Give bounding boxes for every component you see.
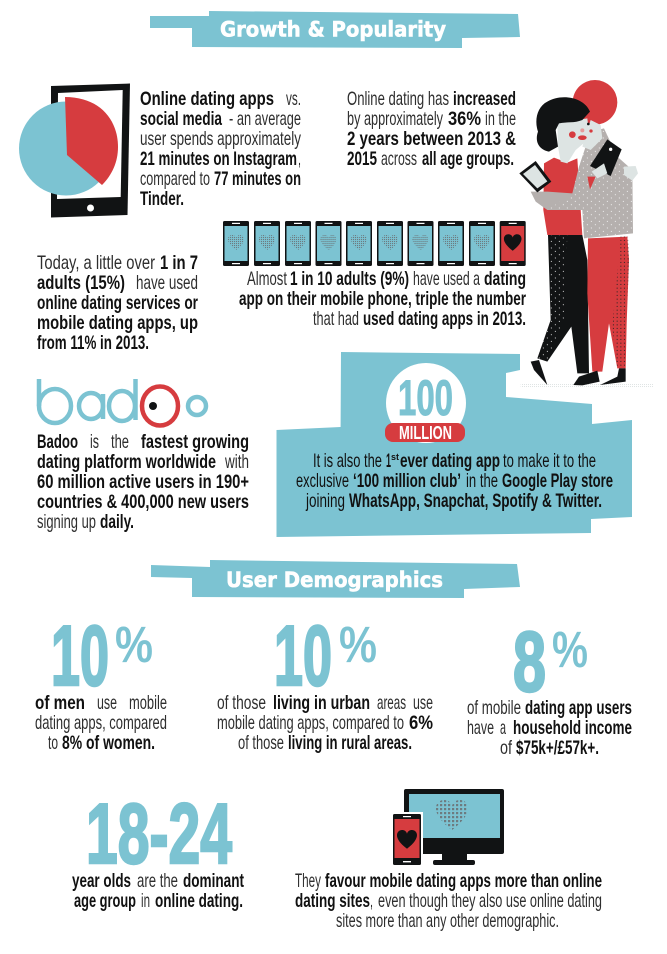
text: online dating increased 36%: 2015 xyxy=(347,148,377,170)
text: online dating increased 36%: Online dating has xyxy=(347,88,449,110)
stat: 18-24 age group xyxy=(72,787,244,912)
stat: 10% urban: use xyxy=(413,692,433,714)
text: 100 million club description: 1 xyxy=(386,450,391,472)
text: Badoo fastest growing: with xyxy=(224,451,249,473)
stat: 10% urban: 6% xyxy=(409,712,433,734)
text: Badoo fastest growing: Badoo xyxy=(37,431,78,453)
stat: 10% urban xyxy=(217,609,433,754)
text: 100 million club description: ‘100 million club’ xyxy=(353,470,461,492)
stat: 8% household income: of mobile xyxy=(467,697,521,719)
text: 100 million club description: It is also the xyxy=(313,450,382,472)
text: Badoo fastest growing: the xyxy=(111,431,129,453)
text: favour mobile dating apps: They xyxy=(295,870,321,892)
stat: 10% of men: 8% of women. xyxy=(62,732,155,754)
text: 1 in 10 adults: used dating apps in 2013. xyxy=(363,308,526,330)
text: Badoo fastest growing: fastest growing xyxy=(141,431,249,453)
heading: Growth & Popularity xyxy=(150,11,520,48)
text: 1 in 10 adults xyxy=(239,268,526,330)
text: 1 in 7 adults: from 11% in 2013. xyxy=(37,332,149,354)
text: Badoo fastest growing: countries & 400,000 new users xyxy=(37,491,249,513)
logo: badoo xyxy=(39,379,206,426)
text: Badoo fastest growing xyxy=(37,431,249,533)
stat: 10% urban: living in urban xyxy=(273,692,370,714)
text: online dating increased 36%: across xyxy=(381,148,417,170)
text: Badoo fastest growing: 60 million active users in 190+ xyxy=(37,471,249,493)
text: 1 in 10 adults: that had xyxy=(313,308,359,330)
illustration: couple with devices xyxy=(519,80,654,388)
text: apps vs social media: 77 minutes on xyxy=(214,168,301,190)
badge: 100 million: MILLION xyxy=(399,423,452,443)
text: Badoo fastest growing: signing up xyxy=(37,511,96,533)
stat: 8% household income: of xyxy=(500,737,512,759)
text: online dating increased 36%: 36% xyxy=(448,108,481,130)
text: 1 in 7 adults: adults (15%) xyxy=(37,272,125,294)
text: apps vs social media: social media xyxy=(140,108,222,130)
text: favour mobile dating apps: dating sites xyxy=(295,890,370,912)
badge: 100 million: 100 xyxy=(398,370,453,426)
text: apps vs social media xyxy=(140,88,301,210)
stat: 10% urban: mobile dating apps, compared to xyxy=(217,712,404,734)
text: 1 in 7 adults: Today, a little over xyxy=(37,252,155,274)
text: 100 million club description: exclusive xyxy=(296,470,349,492)
text: Badoo fastest growing: dating platform worldwide xyxy=(37,451,216,473)
text: 1 in 7 adults: mobile dating apps, up xyxy=(37,312,198,334)
text: apps vs social media: - an average xyxy=(229,108,301,130)
text: apps vs social media: compared to xyxy=(140,168,210,190)
icon: monitor and phone with hearts xyxy=(391,789,504,867)
text: 1 in 7 adults: have used xyxy=(136,272,198,294)
text: apps vs social media: vs. xyxy=(286,88,301,110)
text: 100 million club description: st xyxy=(391,452,399,462)
stat: 10% urban: of those xyxy=(217,692,266,714)
text: 100 million club description: ever dating app xyxy=(400,450,500,472)
stat: 8% household income: 8 xyxy=(513,615,546,710)
icon row: ten phones, one highlighted xyxy=(223,221,526,266)
text: 100 million club description: Google Play store xyxy=(502,470,613,492)
stat: 10% urban: areas xyxy=(377,692,406,714)
stat: 10% of men: to xyxy=(48,732,58,754)
panel: 100 million club xyxy=(276,352,632,537)
stat: 10% of men: mobile xyxy=(129,692,167,714)
text: 1 in 10 adults: have used a xyxy=(413,268,480,290)
stat: 18-24 age group: year olds xyxy=(72,870,131,892)
text: apps vs social media: , xyxy=(298,148,301,170)
stat: 10% of men: % xyxy=(115,616,153,673)
text: online dating increased 36% xyxy=(347,88,516,170)
stat: 10% urban: % xyxy=(339,616,377,673)
text: 1 in 7 adults: online dating services or xyxy=(37,292,198,314)
stat: 18-24 age group: age group xyxy=(74,890,136,912)
text: 100 million club description: in the xyxy=(466,470,498,492)
text: apps vs social media: Online dating apps xyxy=(140,88,274,110)
text: online dating increased 36%: increased xyxy=(453,88,516,110)
text: 1 in 10 adults: dating xyxy=(484,268,526,290)
text: 1 in 10 adults: app on their mobile phone, triple the number xyxy=(239,288,526,310)
stat: 18-24 age group: 18-24 xyxy=(86,787,232,882)
text: apps vs social media: user spends approximately xyxy=(140,128,301,150)
text: 100 million club description: joining xyxy=(305,490,345,512)
stat: 8% household income: have xyxy=(467,717,494,739)
stat: 18-24 age group: online dating. xyxy=(155,890,243,912)
heading: User Demographics: User Demographics xyxy=(226,568,443,592)
text: 100 million club description: to make it to the xyxy=(503,450,596,472)
text: apps vs social media: Tinder. xyxy=(140,188,184,210)
stat: 10% of men: of men xyxy=(35,692,85,714)
text: 1 in 7 adults: 1 in 7 xyxy=(160,252,198,274)
text: apps vs social media: 21 minutes on Instagram xyxy=(140,148,297,170)
stat: 10% of men: use xyxy=(97,692,117,714)
stat: 18-24 age group: in xyxy=(141,890,150,912)
stat: 8% household income: $75k+/£57k+. xyxy=(516,737,599,759)
text: online dating increased 36%: in the xyxy=(485,108,516,130)
text: online dating increased 36%: 2 years between 2013 & xyxy=(347,128,516,150)
text: 1 in 7 adults xyxy=(37,252,198,354)
heading: User Demographics xyxy=(151,560,520,598)
stat: 8% household income: % xyxy=(552,621,588,678)
stat: 10% urban: of those xyxy=(238,732,284,754)
stat: 18-24 age group: dominant xyxy=(183,870,244,892)
stat: 18-24 age group: are the xyxy=(137,870,178,892)
text: favour mobile dating apps: , xyxy=(370,890,373,912)
heading: Growth & Popularity: Growth & Popularity xyxy=(220,18,446,42)
text: online dating increased 36%: all age groups. xyxy=(422,148,514,170)
stat: 10% of men: dating apps, compared xyxy=(35,712,167,734)
text: 1 in 10 adults: Almost xyxy=(247,268,287,290)
badge: 100 million xyxy=(385,363,466,443)
text: Badoo fastest growing: is xyxy=(90,431,99,453)
text: favour mobile dating apps xyxy=(295,870,602,932)
text: Badoo fastest growing: daily. xyxy=(100,511,134,533)
text: 1 in 10 adults: 1 in 10 adults (9%) xyxy=(290,268,409,290)
text: 100 million club description xyxy=(296,450,613,512)
stat: 10% urban: 10 xyxy=(274,609,332,704)
stat: 10% of men xyxy=(35,609,167,754)
stat: 8% household income xyxy=(467,615,632,759)
text: online dating increased 36%: by approximately xyxy=(347,108,443,130)
icon: tablet with pie chart xyxy=(19,84,130,218)
stat: 10% urban: living in rural areas. xyxy=(288,732,412,754)
stat: 8% household income: a xyxy=(500,717,506,739)
stat: 10% of men: 10 xyxy=(51,609,109,704)
